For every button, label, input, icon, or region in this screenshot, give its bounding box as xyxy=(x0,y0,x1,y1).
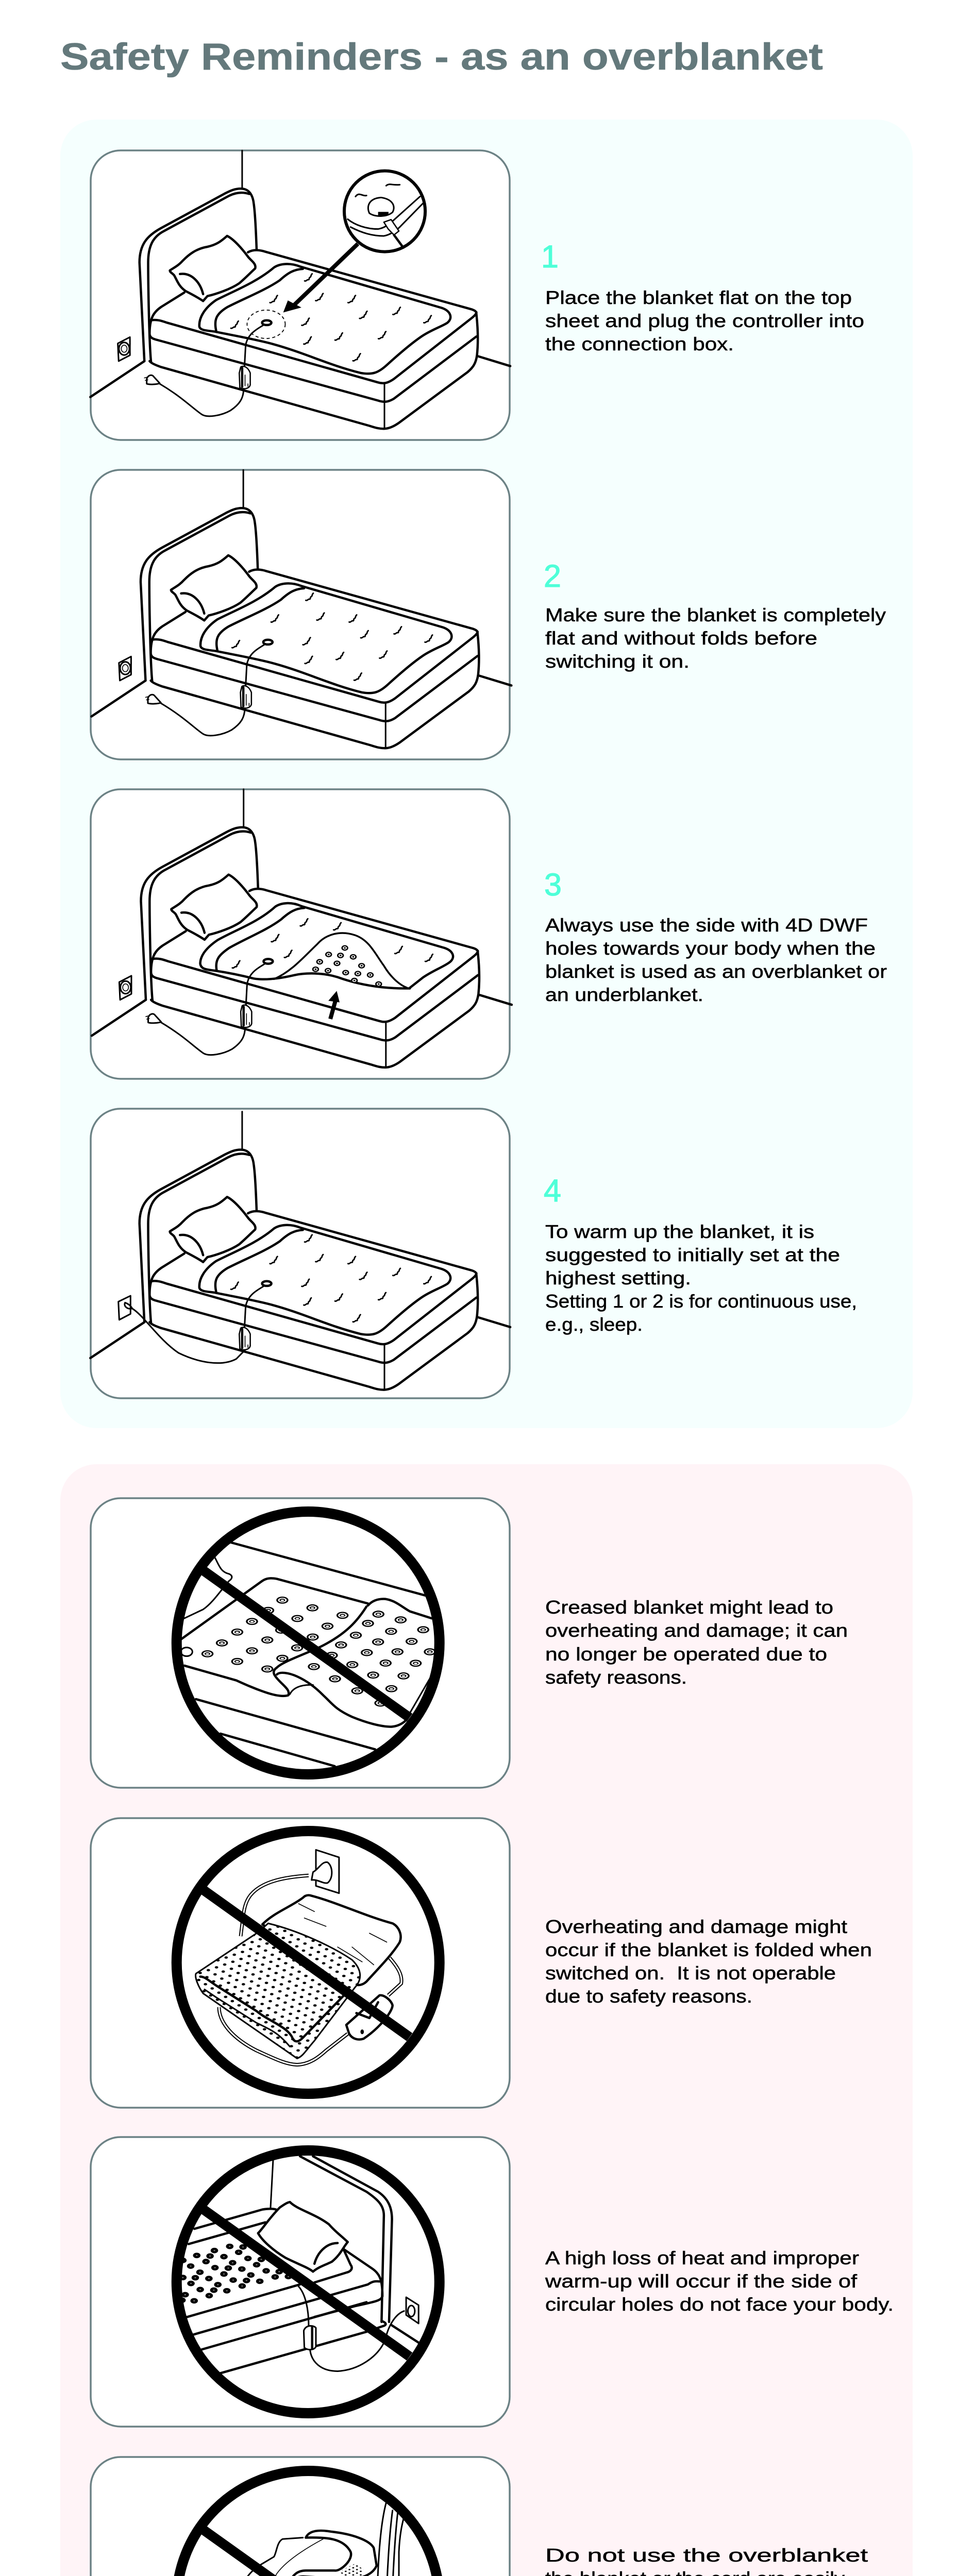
step 4 text: highest setting. xyxy=(545,1267,691,1289)
step 1 text: the connection box. xyxy=(545,333,734,354)
step 3 text: blanket is used as an overblanket or xyxy=(545,961,887,982)
step 2 text xyxy=(545,604,886,672)
step 4 illustration card xyxy=(90,1109,510,1398)
warning 3 text: circular holes do not face your body. xyxy=(545,2294,894,2315)
step 1 text: sheet and plug the controller into xyxy=(545,310,864,331)
step 4 text: suggested to initially set at the xyxy=(545,1244,840,1265)
warning 2 illustration card: folded blanket xyxy=(91,1818,510,2108)
step 2 text: Make sure the blanket is completely xyxy=(545,604,886,625)
step 1 illustration card xyxy=(90,150,510,440)
warning 1 text: overheating and damage; it can xyxy=(545,1620,848,1641)
step 3 text xyxy=(545,914,887,1005)
step 3 text: an underblanket. xyxy=(545,984,703,1005)
step 4 text xyxy=(545,1221,857,1335)
warning 2 text: due to safety reasons. xyxy=(545,1986,752,2007)
step 4 text: Setting 1 or 2 is for continuous use, xyxy=(545,1291,857,1312)
warning 2 text: occur if the blanket is folded when xyxy=(545,1939,872,1960)
warning 3 text xyxy=(545,2247,894,2315)
step 3 text: Always use the side with 4D DWF xyxy=(545,914,868,936)
step 4 text: e.g., sleep. xyxy=(545,1314,643,1335)
warning 3 text: warm-up will occur if the side of xyxy=(545,2270,858,2292)
warning 1 text xyxy=(545,1597,848,1688)
warning 2 text xyxy=(545,1916,872,2007)
step 2 illustration card xyxy=(91,470,511,759)
title: Safety Reminders - as an overblanket xyxy=(60,36,823,78)
warning 4 text: Do not use the overblanket xyxy=(545,2545,868,2566)
warning 4 illustration card: office chair xyxy=(91,2457,510,2576)
step 4 number: 4 xyxy=(544,1173,561,1208)
panel: warnings xyxy=(60,1464,913,2576)
step 4 text: To warm up the blanket, it is xyxy=(545,1221,814,1242)
step 2 text: switching it on. xyxy=(545,651,690,672)
step 1 text: Place the blanket flat on the top xyxy=(545,287,852,308)
warning 1 illustration card: creased blanket xyxy=(91,1498,510,1788)
warning 4 text xyxy=(545,2545,868,2576)
step 2 number: 2 xyxy=(544,558,561,594)
warning 1 text: safety reasons. xyxy=(545,1667,687,1688)
warning 3 text: A high loss of heat and improper xyxy=(545,2247,859,2268)
step 1 number: 1 xyxy=(541,239,559,274)
step 3 number: 3 xyxy=(544,867,562,902)
step 3 text: holes towards your body when the xyxy=(545,938,876,959)
warning 1 text: no longer be operated due to xyxy=(545,1643,827,1665)
warning 1 text: Creased blanket might lead to xyxy=(545,1597,833,1618)
warning 3 illustration card: wrong side up xyxy=(91,2137,510,2427)
step 3 illustration card xyxy=(91,789,512,1079)
step 2 text: flat and without folds before xyxy=(545,628,817,649)
step 1 text xyxy=(545,287,864,354)
warning 2 text: switched on. It is not operable xyxy=(545,1962,836,1984)
panel: how to use steps xyxy=(60,120,913,1428)
warning 2 text: Overheating and damage might xyxy=(545,1916,847,1937)
